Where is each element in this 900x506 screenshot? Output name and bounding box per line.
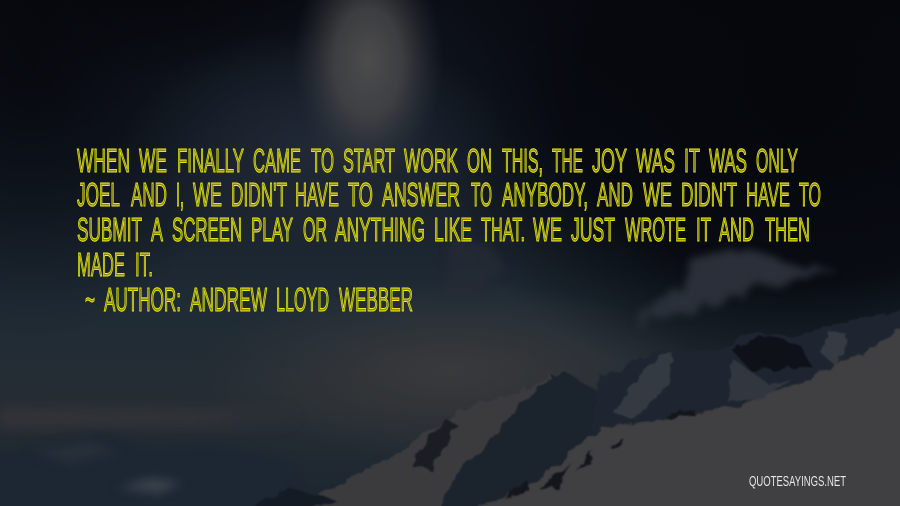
quote line 2: HAVE	[746, 176, 790, 213]
quote line 1: WAS	[636, 142, 675, 179]
quote line 3: WROTE	[625, 211, 686, 248]
quote text	[77, 142, 821, 318]
quote line 2: DIDN'T	[681, 176, 737, 213]
author attribution: AUTHOR:	[104, 281, 181, 318]
quote line 2: HAVE	[295, 176, 339, 213]
quote line 1: THIS,	[502, 142, 543, 179]
quote line 1: WAS	[709, 142, 747, 179]
background: clouds	[440, 235, 835, 325]
background: far ridge right	[590, 308, 900, 460]
author attribution: LLOYD	[276, 281, 329, 318]
watermark: QUOTESAYINGS.NET	[749, 473, 846, 490]
quote line 4: MADE	[77, 246, 125, 283]
author attribution: ~	[85, 281, 95, 318]
quote line 3: AND	[719, 211, 754, 248]
background: snow slope	[475, 326, 900, 506]
quote line 1: TO	[311, 142, 334, 179]
quote line 3: JUST	[571, 211, 615, 248]
quote line 3: ANYTHING	[335, 211, 425, 248]
background: central mountain	[245, 371, 620, 506]
quote line 3: THEN	[765, 211, 810, 248]
quote line 2: ANSWER	[382, 176, 460, 213]
quote line 3: WE	[533, 211, 562, 248]
quote line 2: WE	[193, 176, 222, 213]
quote line 2: WE	[643, 176, 672, 213]
quote line 3: THAT.	[481, 211, 525, 248]
quote line 2: I,	[176, 176, 184, 213]
quote line 2: AND	[597, 176, 633, 213]
quote line 1: WORK	[404, 142, 458, 179]
quote line 1	[77, 142, 798, 179]
quote line 1: START	[343, 142, 395, 179]
quote line 2: DIDN'T	[231, 176, 287, 213]
quote text: ONLY	[756, 142, 798, 179]
quote line 1: IT	[684, 142, 700, 179]
quote line 1: JOY	[592, 142, 627, 179]
quote line 3	[77, 211, 810, 248]
quote line 2: TO	[471, 176, 492, 213]
quote line 1: CAME	[253, 142, 301, 179]
quote line 3: IT	[696, 211, 711, 248]
quote line 2: JOEL	[77, 176, 120, 213]
background: distant range left	[0, 434, 300, 506]
quote line 2: AND	[131, 176, 167, 213]
author attribution: ANDREW	[190, 281, 267, 318]
quote line 2: TO	[348, 176, 373, 213]
quote line 3: LIKE	[434, 211, 472, 248]
quote line 3: PLAY	[251, 211, 293, 248]
quote line 2	[77, 176, 821, 213]
quote line 3: SCREEN	[172, 211, 242, 248]
quote line 3: A	[151, 211, 163, 248]
text: TO	[799, 176, 821, 213]
quote line 1: ON	[467, 142, 492, 179]
quote line 1: WE	[139, 142, 167, 179]
author attribution: WEBBER	[339, 281, 413, 318]
quote line 4: IT.	[135, 246, 153, 283]
quote line 3: SUBMIT	[77, 211, 142, 248]
author attribution	[85, 281, 413, 318]
quote line 1: THE	[552, 142, 583, 179]
quote line 3: OR	[303, 211, 327, 248]
quote line 2: ANYBODY,	[502, 176, 588, 213]
quote line 1: WHEN	[77, 142, 130, 179]
quote line 1: FINALLY	[177, 142, 244, 179]
